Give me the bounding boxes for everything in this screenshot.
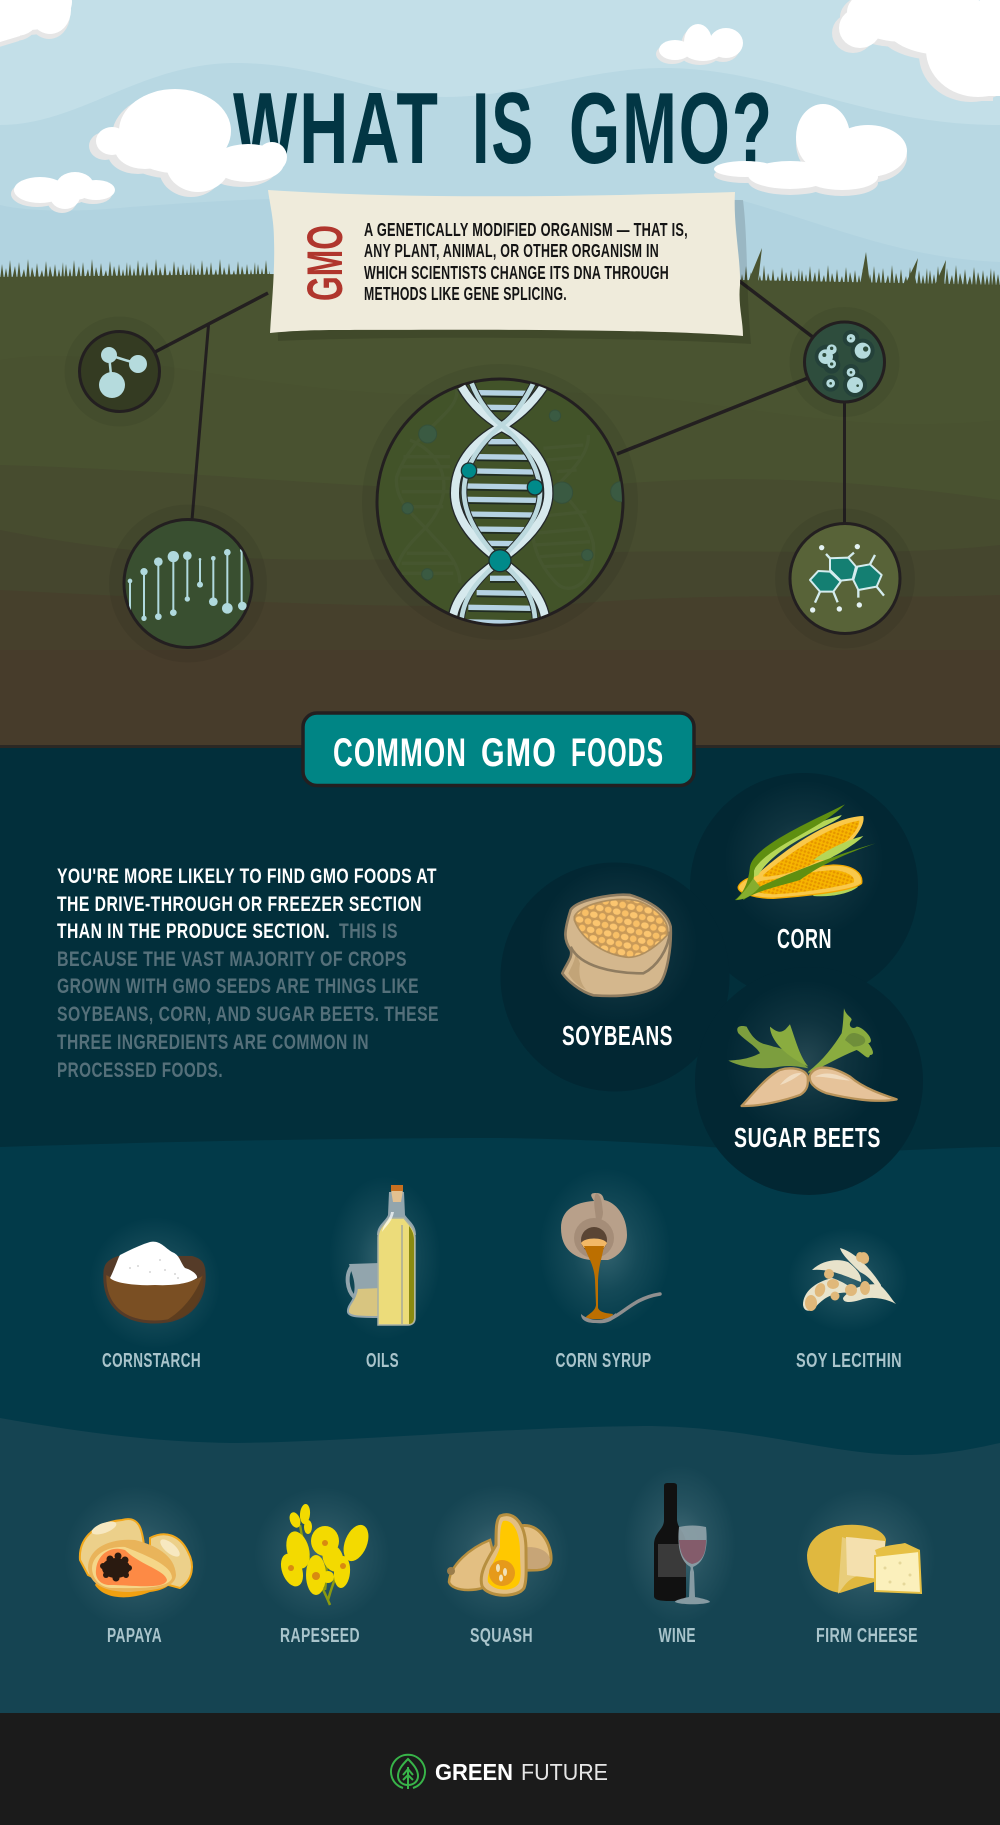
- text block: intro paragraph: PROCESSED FOODS.: [57, 1058, 223, 1082]
- icon: cheese: [807, 1525, 921, 1594]
- ghost helix: [396, 565, 403, 575]
- section heading: common GMO foods: FOODS: [571, 731, 664, 775]
- icon: leaf logo: [391, 1755, 425, 1789]
- icon: oil bottle and jug: [348, 1185, 416, 1325]
- soybeans panel: [500, 862, 730, 1092]
- papaya item: [64, 1486, 208, 1647]
- label: OILS: [366, 1349, 399, 1372]
- definition text: [364, 219, 688, 304]
- label: SUGAR BEETS: [734, 1122, 881, 1153]
- footer logo: GREEN: [435, 1759, 513, 1785]
- wine item: [624, 1465, 736, 1647]
- label: FIRM CHEESE: [816, 1624, 918, 1647]
- text block: intro paragraph: THIS IS: [339, 919, 398, 943]
- label: SOYBEANS: [562, 1020, 673, 1051]
- title: GMO?: [569, 73, 774, 185]
- oils item: [329, 1176, 441, 1372]
- rapeseed item: [254, 1487, 390, 1647]
- label: RAPESEED: [280, 1624, 360, 1647]
- icon: cells circle: [790, 307, 900, 417]
- section heading: common GMO foods: COMMON: [333, 731, 467, 775]
- section heading: common GMO foods: [303, 713, 694, 786]
- firm cheese item: [796, 1488, 936, 1647]
- icon: butternut squash: [447, 1515, 551, 1595]
- icon: bowl of cornstarch: [104, 1242, 205, 1322]
- strands: [453, 387, 548, 617]
- label: SQUASH: [470, 1624, 533, 1647]
- corn panel: [690, 773, 918, 1001]
- title: [233, 73, 774, 185]
- title: WHAT: [233, 73, 440, 185]
- definition text: WHICH SCIENTISTS CHANGE ITS DNA THROUGH: [364, 262, 669, 283]
- icon: papaya: [80, 1519, 192, 1597]
- soy lecithin item: [788, 1228, 908, 1372]
- cornstarch item: [89, 1217, 221, 1372]
- sugar beets panel: [695, 967, 923, 1195]
- icon: sack of soybeans: [562, 895, 671, 996]
- background: ground: [0, 248, 1000, 750]
- definition text: ANY PLANT, ANIMAL, OR OTHER ORGANISM IN: [364, 240, 659, 261]
- icon: molecule circle: [64, 316, 174, 426]
- icon: sugar beets: [728, 1008, 897, 1106]
- corn syrup item: [539, 1168, 671, 1372]
- text block: intro paragraph: GROWN WITH GMO SEEDS ARE THINGS LIKE: [57, 974, 419, 998]
- label: PAPAYA: [107, 1624, 162, 1647]
- text block: intro paragraph: SOYBEANS, CORN, AND SUGAR BEETS. THESE: [57, 1002, 439, 1026]
- label: WINE: [658, 1624, 696, 1647]
- text block: intro paragraph: BECAUSE THE VAST MAJORITY OF CROPS: [57, 947, 407, 971]
- label: CORNSTARCH: [102, 1349, 201, 1372]
- rungs: [467, 396, 536, 613]
- icon: chemical structure circle: [775, 508, 915, 648]
- squash item: [430, 1485, 570, 1647]
- clouds: [0, 0, 1000, 213]
- icon: gene strands circle: [122, 518, 254, 649]
- icon: soy pods: [803, 1248, 896, 1311]
- background: sky: [0, 0, 1000, 300]
- definition text: A GENETICALLY MODIFIED ORGANISM — THAT IS,: [364, 219, 688, 240]
- panel: common GMO foods background: [0, 745, 1000, 1825]
- grass: [0, 248, 1000, 286]
- label: CORN: [777, 923, 832, 954]
- footer logo: [391, 1755, 608, 1789]
- title: IS: [472, 73, 535, 185]
- text block: intro paragraph: THE DRIVE-THROUGH OR FREEZER SECTION: [57, 892, 422, 916]
- text block: intro paragraph: THREE INGREDIENTS ARE COMMON IN: [57, 1030, 369, 1054]
- footer logo: FUTURE: [521, 1759, 608, 1785]
- connector lines: [155, 280, 844, 525]
- definition text: METHODS LIKE GENE SPLICING.: [364, 283, 567, 304]
- icon: wine bottle and glass: [654, 1483, 710, 1604]
- text block: intro paragraph: YOU'RE MORE LIKELY TO FIND GMO FOODS AT: [57, 864, 437, 888]
- icon: rapeseed flowers: [277, 1504, 373, 1605]
- icon: syrup jug and spoon: [561, 1193, 660, 1323]
- icon: central DNA helix circle: [376, 378, 624, 626]
- text block: intro paragraph: [57, 864, 439, 1082]
- definition banner: [268, 190, 751, 344]
- text block: intro paragraph: THAN IN THE PRODUCE SECTION.: [57, 919, 330, 943]
- icon: corn: [735, 804, 876, 900]
- section heading: common GMO foods: GMO: [481, 731, 557, 775]
- label: CORN SYRUP: [556, 1349, 652, 1372]
- vertical GMO label: GMO: [297, 225, 353, 301]
- label: SOY LECITHIN: [796, 1349, 902, 1372]
